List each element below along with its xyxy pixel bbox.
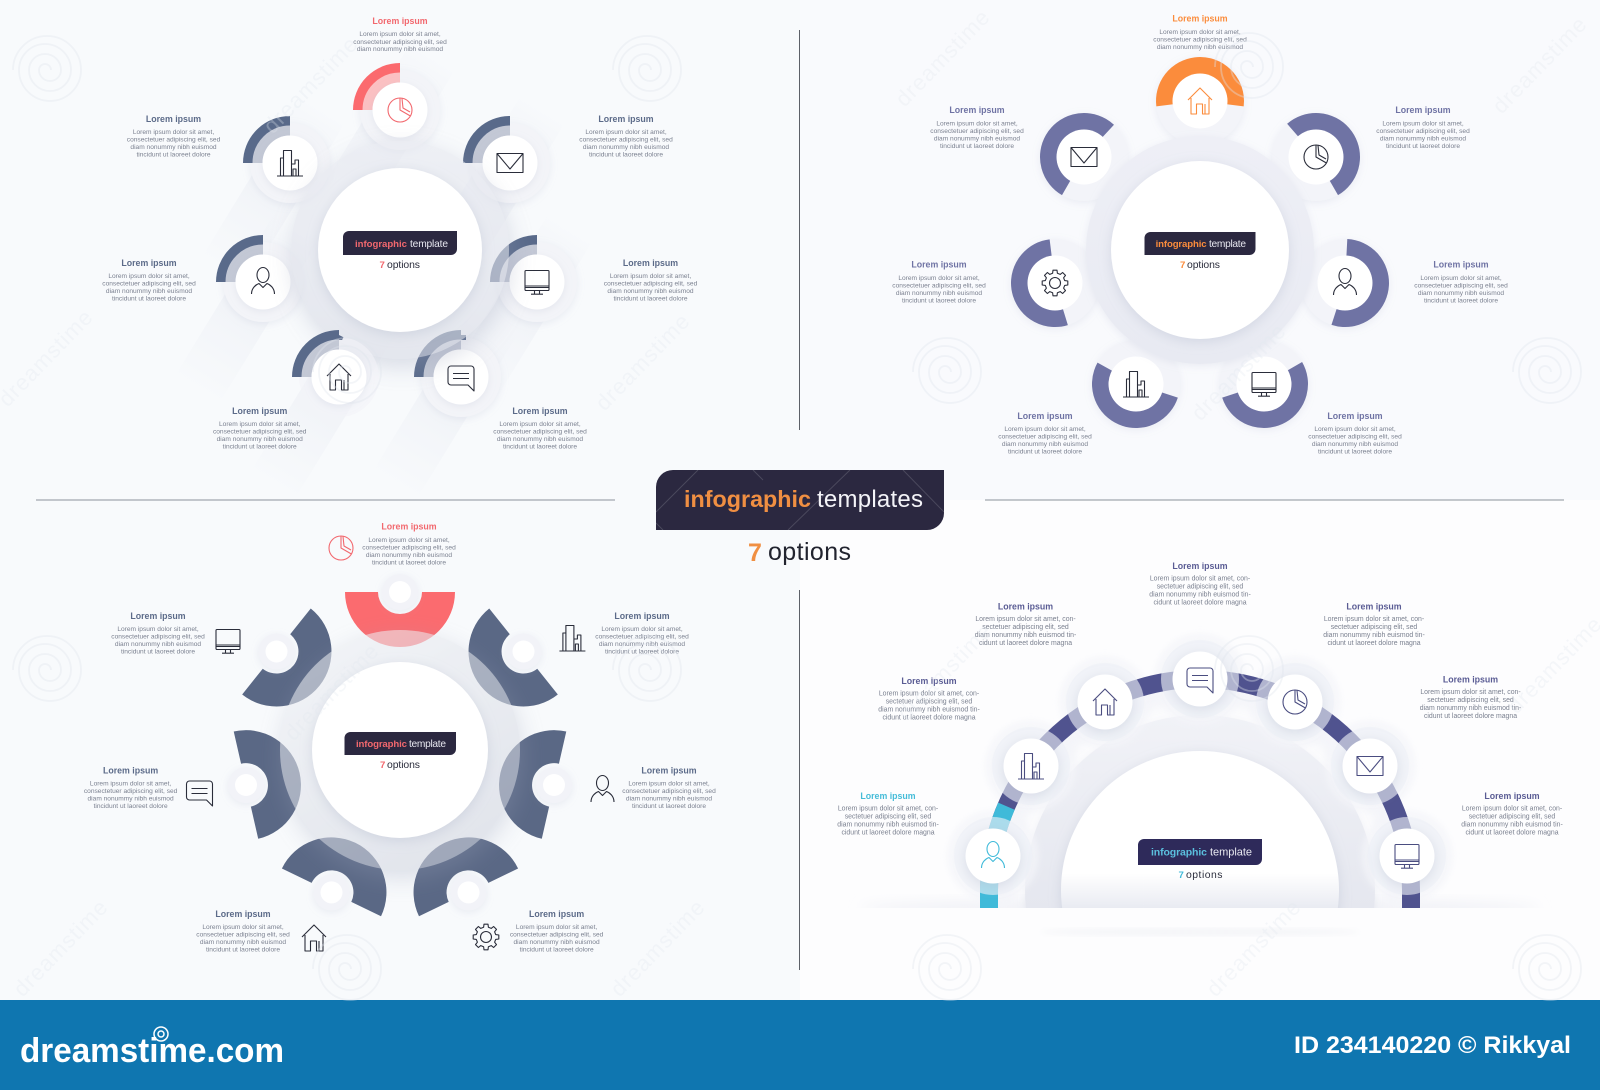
label: top: consectetuer adipiscing elit, sed [362,544,456,552]
label: right: consectetuer adipiscing elit, sed [604,280,698,288]
label: right: tincidunt ut laoreet dolore [613,296,688,302]
title: infographic templates: infographic [684,486,811,512]
title: infographic templates [656,470,944,530]
node: buildings [1091,339,1181,429]
arch ring [989,679,1411,908]
label: mid left: sectetuer adipiscing elit, sed [886,698,972,706]
text: dreamstime [258,31,363,138]
label: mid right: diam nonummy nibh euismod tin- [1420,705,1521,712]
label: top: Lorem ipsum [381,522,437,532]
label: lower left: Lorem ipsum [860,791,916,801]
label: bottom left: Lorem ipsum [1017,411,1073,421]
label: lower right: Lorem ipsum [1484,791,1540,801]
label: top left: tincidunt ut laoreet dolore [136,152,211,158]
label: top left: tincidunt ut laoreet dolore [121,648,195,656]
label: top: diam nonummy nibh euismod [357,46,443,53]
label: upper left: Lorem ipsum [998,602,1053,612]
node: pie chart [358,68,442,152]
label: top left: Lorem ipsum dolor sit amet, [936,120,1018,128]
label: bottom left: diam nonummy nibh euismod [1002,441,1088,448]
label: top right: Lorem ipsum dolor sit amet, [601,626,683,633]
center badge: 7 [380,260,385,271]
label: right: diam nonummy nibh euismod [1418,290,1504,297]
center badge: template [410,239,448,250]
footer band [0,1000,1600,1090]
node: monitor [495,240,579,324]
label: mid right: sectetuer adipiscing elit, sed [1427,697,1514,704]
label: bottom right: tincidunt ut laoreet dolore [520,946,594,954]
label: bottom left: Lorem ipsum dolor sit amet, [1004,426,1086,433]
label: top: Lorem ipsum dolor sit amet, con- [1150,575,1250,582]
label: left: tincidunt ut laoreet dolore [902,298,976,304]
floor shadow [928,902,1472,908]
label: mid right: cidunt ut laoreet dolore magna [1424,713,1517,720]
label: left: diam nonummy nibh euismod [88,796,174,802]
label: right: consectetuer adipiscing elit, sed [622,788,716,795]
label: left: diam nonummy nibh euismod [896,290,982,297]
label: top: Lorem ipsum [1172,561,1228,571]
label: top right: Lorem ipsum dolor sit amet, [585,129,667,136]
label: lower right: diam nonummy nibh euismod tin- [1461,822,1563,828]
icon: gear [473,924,499,950]
label: top: sectetuer adipiscing elit, sed [1157,583,1243,590]
label: mid left: Lorem ipsum dolor sit amet, con- [879,690,979,698]
node: home [1066,663,1144,741]
label: bottom left: diam nonummy nibh euismod [217,436,303,443]
node: envelope [1036,109,1132,205]
label: top left: tincidunt ut laoreet dolore [940,143,1014,150]
node: buildings [248,121,332,205]
label: bottom right: Lorem ipsum [512,406,568,416]
label: right: tincidunt ut laoreet dolore [1424,298,1498,304]
label: bottom left: Lorem ipsum dolor sit amet, [219,421,301,428]
center badge: infographic [1151,846,1207,858]
label: left: Lorem ipsum dolor sit amet, [898,275,980,282]
node: person [221,240,305,324]
label: top right: diam nonummy nibh euismod [599,641,685,648]
panel: fan segments option, bottom left [84,522,716,954]
label: mid right: Lorem ipsum [1443,674,1498,684]
label: right: Lorem ipsum dolor sit amet, [1420,275,1502,282]
label: top: Lorem ipsum dolor sit amet, [1159,29,1241,36]
label: top: tincidunt ut laoreet dolore [372,560,446,566]
icon: person [591,776,614,802]
label: top left: consectetuer adipiscing elit, sed [111,634,205,640]
label: left: diam nonummy nibh euismod [106,288,192,295]
text: dreamstime [8,894,113,1001]
label: top: cidunt ut laoreet dolore magna [1153,599,1247,606]
text: dreamstime [1186,318,1291,425]
label: mid left: Lorem ipsum [901,676,957,686]
icon: chat [186,781,212,806]
subtitle: 7 options: 7 [748,539,762,567]
label: top: diam nonummy nibh euismod tin- [1149,591,1251,598]
label: lower right: cidunt ut laoreet dolore magna [1465,830,1559,836]
label: top: diam nonummy nibh euismod [366,552,452,559]
node: buildings [992,727,1070,805]
label: top left: Lorem ipsum [146,114,201,124]
label: lower left: cidunt ut laoreet dolore magna [841,830,935,836]
label: bottom left: Lorem ipsum [232,406,287,416]
label: left: tincidunt ut laoreet dolore [112,296,186,302]
label: bottom right: diam nonummy nibh euismod [497,436,583,443]
label: upper right: Lorem ipsum [1346,602,1402,612]
label: right: consectetuer adipiscing elit, sed [1414,282,1508,290]
center badge: template [409,739,446,750]
label: bottom right: diam nonummy nibh euismod [1312,441,1398,448]
label: left: Lorem ipsum dolor sit amet, [108,273,190,280]
logo: dreamstime.com: dreamstime.com [20,1032,284,1070]
label: top left: Lorem ipsum dolor sit amet, [133,129,214,136]
text: dreamstime [1201,894,1306,1001]
label: bottom right: Lorem ipsum [529,909,584,919]
label: right: Lorem ipsum dolor sit amet, [628,780,710,788]
label: upper left: diam nonummy nibh euismod tin- [975,632,1076,639]
node: pie chart [1256,663,1334,741]
label: top right: Lorem ipsum [614,611,670,621]
center badge: options [387,260,420,271]
subtitle: 7 options: options [768,538,851,566]
label: bottom right: Lorem ipsum dolor sit amet, [499,421,581,428]
label: mid left: cidunt ut laoreet dolore magna [882,714,976,722]
arch inner shading [1326,741,1327,742]
center badge: 7 [380,760,385,771]
label: bottom left: diam nonummy nibh euismod [200,939,286,946]
label: top right: Lorem ipsum [1395,105,1451,115]
label: mid right: Lorem ipsum dolor sit amet, con- [1420,689,1521,696]
label: bottom right: Lorem ipsum dolor sit amet, [1314,426,1396,433]
node: monitor [1216,336,1312,432]
label: bottom left: tincidunt ut laoreet dolore [206,946,280,954]
label: lower right: sectetuer adipiscing elit, sed [1469,814,1555,820]
label: upper right: cidunt ut laoreet dolore magna [1327,640,1421,647]
label: top left: consectetuer adipiscing elit, sed [930,128,1024,135]
center badge [344,732,456,771]
label: top right: tincidunt ut laoreet dolore [605,648,679,656]
center badge: infographic [356,739,408,750]
label: lower right: Lorem ipsum dolor sit amet, con- [1462,806,1562,812]
label: left: Lorem ipsum [121,258,177,268]
label: top left: Lorem ipsum dolor sit amet, [117,626,199,633]
icon: monitor [216,630,240,653]
node: pie chart [1266,107,1366,207]
node: person [954,817,1032,895]
label: mid left: diam nonummy nibh euismod tin- [878,706,980,714]
label: top left: consectetuer adipiscing elit, sed [127,136,221,144]
label: right: Lorem ipsum dolor sit amet, [610,273,691,280]
label: left: Lorem ipsum [911,260,967,270]
center badge: options [1186,870,1222,881]
label: bottom left: tincidunt ut laoreet dolore [1008,448,1082,456]
label: top right: consectetuer adipiscing elit, sed [1376,128,1470,135]
center badge: infographic [355,239,408,250]
label: bottom right: consectetuer adipiscing elit, sed [1308,434,1402,440]
label: top right: tincidunt ut laoreet dolore [1386,143,1460,150]
image id credit: ID 234140220 © Rikkyal [1294,1032,1571,1059]
label: bottom left: tincidunt ut laoreet dolore [223,444,297,450]
label: bottom right: tincidunt ut laoreet dolore [1318,448,1392,456]
center badge: options [1187,260,1220,271]
label: left: tincidunt ut laoreet dolore [94,803,168,810]
central dome [1025,717,1375,908]
label: top: Lorem ipsum [1172,14,1228,24]
center badge: options [387,760,420,771]
label: lower left: sectetuer adipiscing elit, sed [845,814,931,820]
icon: buildings [559,626,585,651]
label: top right: diam nonummy nibh euismod [1380,136,1466,142]
label: bottom left: Lorem ipsum [215,909,271,919]
label: upper left: sectetuer adipiscing elit, sed [982,624,1069,631]
central disc [1086,136,1314,364]
label: top: diam nonummy nibh euismod [1157,44,1243,51]
panel: long shadow option, top left [102,16,698,501]
label: bottom right: consectetuer adipiscing elit, sed [510,932,604,938]
icon: pie chart [329,536,353,560]
label: top right: diam nonummy nibh euismod [583,144,669,151]
label: bottom left: Lorem ipsum dolor sit amet, [202,924,284,931]
panel: donut ring option, top right [892,14,1508,456]
label: upper right: sectetuer adipiscing elit, sed [1331,624,1417,631]
label: right: tincidunt ut laoreet dolore [632,803,706,810]
text: dreamstime [279,638,384,745]
panel: arch option, bottom right [838,562,1562,908]
label: top: Lorem ipsum dolor sit amet, [359,31,441,38]
text: dreamstime [605,894,710,1001]
label: upper left: Lorem ipsum dolor sit amet, con- [975,616,1076,623]
label: bottom right: Lorem ipsum dolor sit amet, [516,924,597,931]
text: dreamstime [590,308,695,415]
center badge [343,231,457,271]
node: home [297,335,381,419]
center badge [1144,232,1256,271]
center badge: infographic [1156,239,1207,250]
label: bottom right: tincidunt ut laoreet dolore [503,444,577,450]
center badge: template [1210,846,1252,858]
label: bottom right: Lorem ipsum [1327,411,1383,421]
fan segments [234,592,566,916]
label: right: Lorem ipsum [641,766,697,776]
node: home [1156,57,1244,145]
label: bottom right: diam nonummy nibh euismod [514,939,600,946]
label: top right: Lorem ipsum dolor sit amet, [1382,120,1464,128]
label: upper right: diam nonummy nibh euismod tin- [1323,632,1425,639]
label: top: Lorem ipsum [372,16,428,26]
node: chat [1161,640,1239,718]
label: top right: Lorem ipsum [598,114,654,124]
icon: home [302,925,326,951]
center badge: template [1209,239,1246,250]
label: left: Lorem ipsum dolor sit amet, [90,780,171,788]
label: left: consectetuer adipiscing elit, sed [102,280,196,288]
label: right: Lorem ipsum [1433,260,1489,270]
label: top right: tincidunt ut laoreet dolore [589,152,663,158]
label: top: Lorem ipsum dolor sit amet, [368,537,450,544]
central disc [291,141,509,359]
label: top left: Lorem ipsum [130,611,186,621]
label: top left: Lorem ipsum [949,105,1005,115]
center badge: 7 [1178,870,1184,881]
node: chat [419,335,503,419]
node: envelope [468,121,552,205]
label: lower left: diam nonummy nibh euismod tin- [837,822,939,828]
center badge: 7 [1180,260,1185,271]
label: lower left: Lorem ipsum dolor sit amet, con- [838,806,938,812]
node: gear [1011,239,1099,327]
label: top: consectetuer adipiscing elit, sed [353,39,447,46]
label: top left: diam nonummy nibh euismod [934,136,1020,142]
label: upper left: cidunt ut laoreet dolore magna [979,640,1072,647]
label: left: Lorem ipsum [103,766,158,776]
node: person [1301,239,1389,327]
label: bottom left: consectetuer adipiscing elit, sed [196,932,290,938]
label: top right: consectetuer adipiscing elit, sed [595,634,689,640]
label: top left: diam nonummy nibh euismod [115,641,201,648]
label: top left: diam nonummy nibh euismod [130,144,217,151]
node: monitor [1368,817,1446,895]
segment dots [228,574,572,910]
central disc [280,630,520,870]
text: dreamstime [890,4,995,111]
center badge [1138,839,1262,881]
label: right: diam nonummy nibh euismod [626,796,712,802]
label: left: consectetuer adipiscing elit, sed [84,788,178,795]
label: top: consectetuer adipiscing elit, sed [1153,36,1247,44]
label: bottom right: consectetuer adipiscing elit, sed [493,428,587,436]
text: dreamstime [1487,11,1592,118]
label: top right: consectetuer adipiscing elit, sed [579,136,673,144]
label: upper right: Lorem ipsum dolor sit amet, con- [1324,616,1424,623]
label: right: diam nonummy nibh euismod [607,288,694,295]
node: envelope [1331,727,1409,805]
title: infographic templates: templates [817,486,923,513]
label: right: Lorem ipsum [623,258,678,268]
label: left: consectetuer adipiscing elit, sed [892,282,986,290]
label: bottom left: consectetuer adipiscing elit, sed [998,434,1092,440]
outer halos [1026,845,1374,884]
text: dreamstime [892,618,997,725]
label: bottom left: consectetuer adipiscing elit, sed [213,428,307,436]
